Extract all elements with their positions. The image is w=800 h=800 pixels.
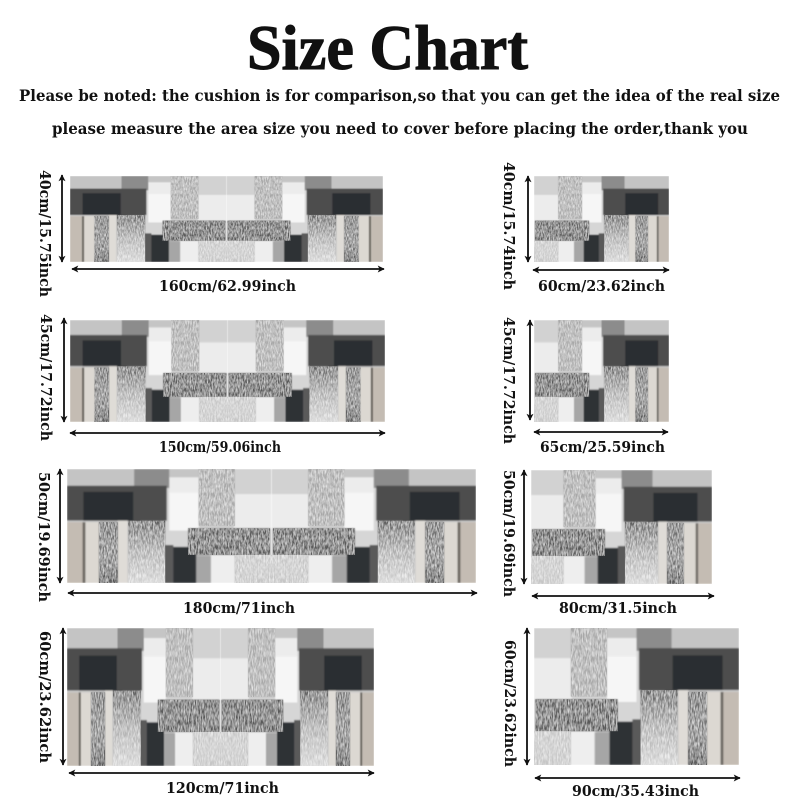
width label: 180cm/71inch [183,600,295,617]
width arrow [72,268,384,270]
width label: 160cm/62.99inch [159,278,296,295]
panel: 80cm by 50cm [500,470,714,617]
panel: 120cm by 60cm [36,628,374,797]
width label: 65cm/25.59inch [540,439,665,456]
height arrow [527,176,529,262]
panel: 160cm by 40cm [36,170,384,297]
height label: 60cm/23.62inch [501,640,518,767]
width arrow [68,592,477,594]
panel: 180cm by 50cm [35,469,477,617]
height arrow [526,628,528,765]
height label: 40cm/15.75inch [36,170,53,297]
height arrow [529,320,531,420]
height label: 60cm/23.62inch [36,631,53,763]
height label: 50cm/19.69inch [35,472,52,602]
painting [534,320,669,422]
width arrow [533,269,669,271]
height label: 40cm/15.74inch [500,162,517,290]
height label: 50cm/19.69inch [500,470,517,597]
panel: 60cm by 40cm [500,162,669,295]
title: Size Chart [247,12,529,83]
width label: 120cm/71inch [166,780,279,797]
width arrow [70,432,385,434]
width label: 80cm/31.5inch [559,600,677,617]
width label: 60cm/23.62inch [538,278,665,295]
painting [531,470,712,584]
width label: 90cm/35.43inch [572,783,699,800]
panel: 65cm by 45cm [500,317,669,456]
panel: 90cm by 60cm [501,628,740,800]
height arrow [59,469,61,583]
width arrow [535,777,740,779]
painting [70,176,383,262]
painting [534,176,669,262]
painting [67,469,476,583]
painting [534,628,739,765]
painting [70,320,385,422]
width arrow [532,595,714,597]
note: measure line: please measure the area size you need to cover before placing the order,thank you [52,119,748,138]
height arrow [523,470,525,584]
height arrow [63,318,65,422]
height label: 45cm/17.72inch [37,314,54,441]
height label: 45cm/17.72inch [500,317,517,444]
height arrow [62,628,64,765]
painting [67,628,374,766]
width label: 150cm/59.06inch [159,439,281,456]
width arrow [534,431,668,433]
panel: 150cm by 45cm [37,314,385,456]
width arrow [69,772,374,774]
height arrow [61,175,63,262]
